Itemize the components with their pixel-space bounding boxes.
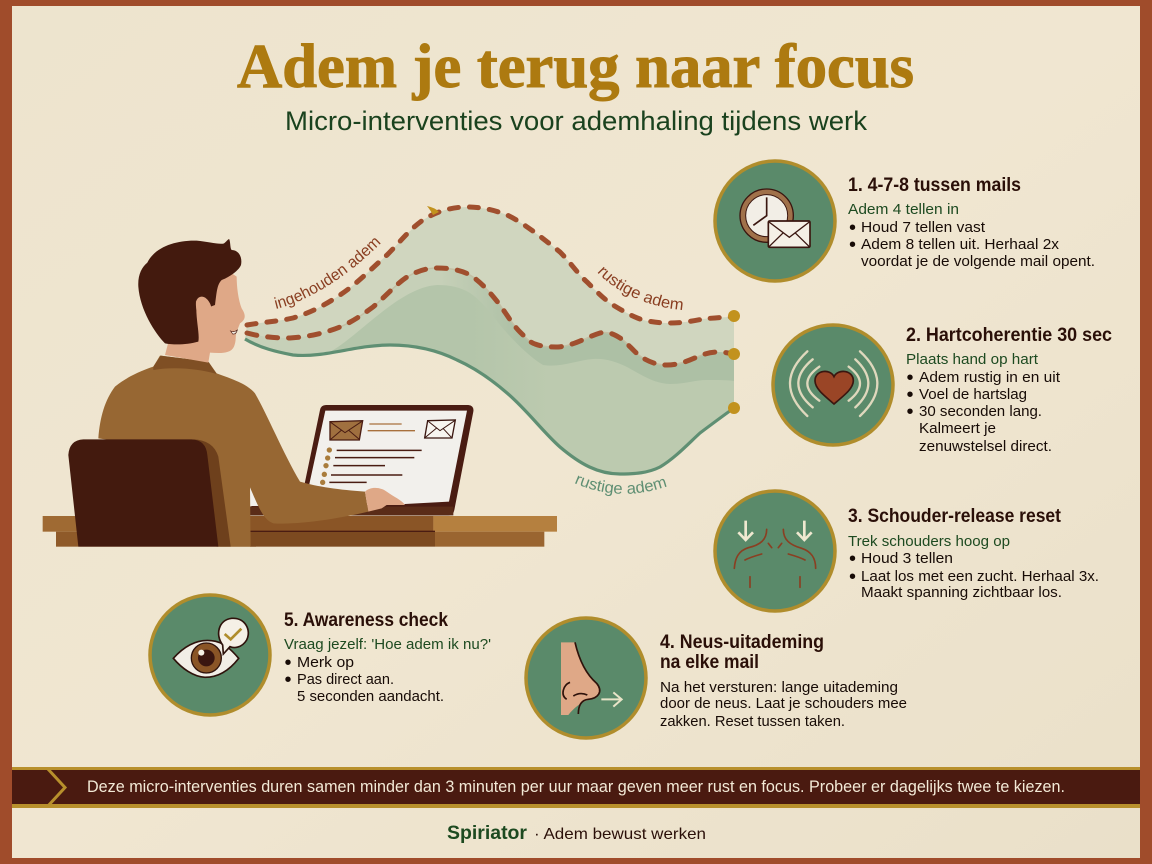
list [849,217,1095,270]
brand: Spiriator [447,823,528,844]
heading: 2. Hartcoherentie 30 sec [906,325,1112,346]
list: Merk op [297,654,354,671]
label: ingehouden adem: ingehouden adem [274,238,381,309]
list: Laat los met een zucht. Herhaal 3x. [861,568,1099,585]
wave area: outer [245,207,734,474]
shirt [98,356,368,547]
label: rustige adem upper: rustige adem [598,266,683,310]
neck and face [165,257,245,363]
end dots [728,310,740,414]
heading [660,632,824,673]
gold marker [427,206,439,215]
list [849,548,1099,601]
list [284,652,444,705]
ear [196,297,211,322]
wave area: lower [330,285,734,474]
list: Voel de hartslag [919,386,1027,403]
description: Na het versturen: lange uitademing [660,679,898,696]
green lead: Adem 4 tellen in [848,201,959,218]
footer [447,823,706,844]
chair [68,439,231,547]
description: zakken. Reset tussen taken. [660,713,845,730]
list: • [284,652,292,674]
list [906,367,1061,455]
heading: 4. Neus-uitademing [660,632,824,653]
list: • [906,367,914,389]
dashed line: held breath [247,207,734,325]
list: Pas direct aan. [297,671,394,688]
list: • [906,401,914,423]
list: • [284,669,292,691]
list: • [849,548,856,570]
list: • [849,217,856,239]
icon: eye with check bubble [150,595,270,715]
list: Houd 3 tellen [861,550,953,567]
banner [12,767,1140,808]
collar [153,356,217,374]
list: Adem 8 tellen uit. Herhaal 2x [861,236,1060,253]
laptop [250,405,473,515]
green lead: Plaats hand op hart [906,351,1039,368]
dashed line: middle breath [247,268,734,365]
breath waves chart [244,204,740,496]
thin line under middle breath [340,268,717,365]
separator and tagline: · Adem bewust werken [534,826,706,843]
description [660,679,907,730]
icon: shoulders with arrows [715,491,835,611]
title: Adem je terug naar focus [237,33,914,101]
panel: 5. Awareness check [150,595,491,715]
list: zenuwstelsel direct. [919,438,1052,455]
list: Kalmeert je [919,420,996,437]
icon: heart with waves [773,325,893,445]
heading: 3. Schouder-release reset [848,506,1062,527]
list: Adem rustig in en uit [919,369,1061,386]
list: Maakt spanning zichtbaar los. [861,584,1062,601]
icon: chevron [47,768,65,807]
list: voordat je de volgende mail opent. [861,253,1095,270]
description: door de neus. Laat je schouders mee [660,695,907,712]
heading: 1. 4-7-8 tussen mails [848,175,1021,196]
mouth [231,330,237,334]
list: 5 seconden aandacht. [297,688,444,705]
list: • [906,384,914,406]
solid line: calm breath [245,339,734,474]
heading: 5. Awareness check [284,610,448,631]
green lead: Vraag jezelf: 'Hoe adem ik nu?' [284,636,491,653]
panel: 3. Schouder-release reset [715,491,1099,611]
list: 30 seconden lang. [919,403,1042,420]
list: Houd 7 tellen vast [861,219,986,236]
label: rustige adem lower: rustige adem [575,476,666,496]
icon: nose with arrow [526,618,646,738]
heading: na elke mail [660,652,759,673]
icon: clock and envelope [715,161,835,281]
hair [138,239,241,344]
list: • [849,234,856,256]
illustration: person at desk [43,239,557,547]
wave area: middle band [245,268,734,474]
subtitle: Micro-interventies voor ademhaling tijdens werk [285,106,868,136]
banner text: Deze micro-interventies duren samen minder dan 3 minuten per uur maar geven meer rust en focus. Probeer er dagelijks twee te kiezen. [87,777,1065,796]
panel: 4. Neus-uitademing na elke mail [526,618,907,738]
list: • [849,566,856,588]
desk [43,516,557,547]
panel: 2. Hartcoherentie 30 sec [773,325,1112,455]
panel: 1. 4-7-8 tussen mails [715,161,1095,281]
green lead: Trek schouders hoog op [848,533,1010,550]
hand [365,488,405,512]
